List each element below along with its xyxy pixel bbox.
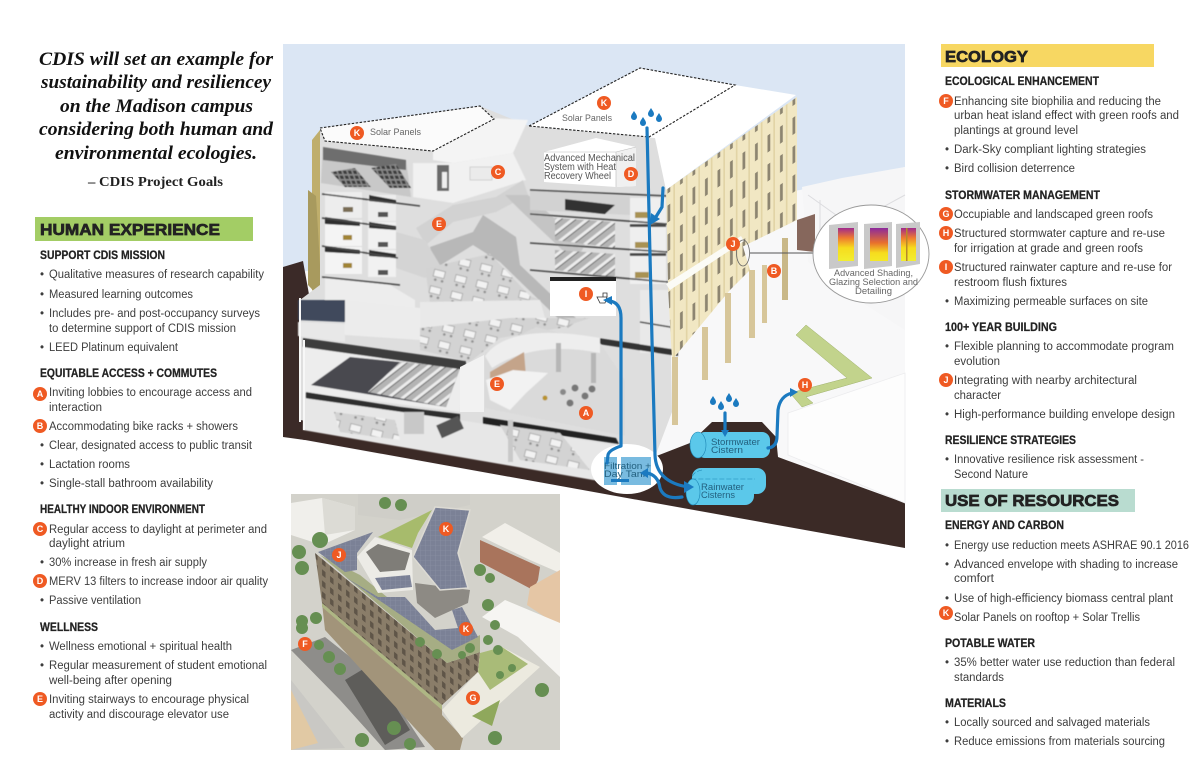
mechanical room floors xyxy=(530,190,678,356)
upper green deck xyxy=(320,555,480,663)
auditorium level xyxy=(303,338,466,420)
section: ecological enhancement: Dark-Sky compliant lighting strategies xyxy=(954,144,1146,156)
heading: human experience: HUMAN EXPERIENCE xyxy=(40,222,220,239)
icon: ground rain drops xyxy=(710,393,739,410)
section: energy and carbon: • xyxy=(945,540,949,552)
section: wellness: activity and discourage elevator use xyxy=(49,709,229,721)
panel: use of resources xyxy=(939,489,1189,748)
section: resilience strategies: • xyxy=(945,454,949,466)
section: wellness: • xyxy=(40,641,44,653)
title: sustainability and resiliencey xyxy=(40,72,272,93)
section: energy and carbon: Solar Panels on rooftop + Solar Trellis xyxy=(954,612,1140,624)
filtration and day tank: Day Tank xyxy=(604,469,648,480)
section: healthy indoor environment: D xyxy=(37,576,44,586)
title: considering both human and xyxy=(39,119,274,140)
stormwater cistern: Cistern xyxy=(711,445,743,456)
section: ecological enhancement: F xyxy=(943,96,949,106)
section: ecological enhancement xyxy=(939,76,1179,175)
slab lines xyxy=(322,190,668,285)
cut floor-plate edge xyxy=(300,298,304,430)
upper facade xyxy=(315,553,480,705)
heading: use of resources: USE OF RESOURCES xyxy=(945,493,1119,510)
green roof xyxy=(378,510,432,548)
mechanical unit xyxy=(544,138,636,187)
section: energy and carbon: Use of high-efficiency biomass central plant xyxy=(954,593,1174,605)
callout: shading and glazing: Detailing xyxy=(855,286,892,297)
section: materials: • xyxy=(945,717,949,729)
soft interior details xyxy=(298,118,678,482)
section: wellness: WELLNESS xyxy=(40,622,98,634)
section: energy and carbon xyxy=(939,520,1189,624)
section: equitable access and commutes: Lactation rooms xyxy=(49,459,130,471)
aerial markers xyxy=(298,522,480,705)
section: healthy indoor environment: Regular access to daylight at perimeter and xyxy=(49,524,267,536)
atrium lobby xyxy=(483,327,625,444)
section: potable water: 35% better water use reduction than federal xyxy=(954,657,1175,669)
left wing rooms xyxy=(325,192,415,318)
section: 100+ year building xyxy=(939,322,1175,421)
section: healthy indoor environment: 30% increase in fresh air supply xyxy=(49,557,207,569)
panel: goal statement xyxy=(39,49,274,189)
rainwater cisterns xyxy=(686,468,766,505)
section: ecological enhancement: Enhancing site biophilia and reducing the xyxy=(954,96,1161,108)
stormwater cistern: Stormwater xyxy=(711,437,760,448)
label: solar panels: Solar Panels xyxy=(562,113,612,124)
section: support CDIS mission: Measured learning outcomes xyxy=(49,289,193,301)
section: energy and carbon: Advanced envelope with shading to increase xyxy=(954,559,1178,571)
map markers: K xyxy=(354,128,361,138)
roof: solar panels right with upper plane xyxy=(529,68,796,190)
interior fill xyxy=(300,106,672,470)
title: on the Madison campus xyxy=(60,96,253,117)
section: potable water xyxy=(945,638,1175,684)
top floor hall xyxy=(321,147,411,197)
section: energy and carbon: Energy use reduction meets ASHRAE 90.1 2016 xyxy=(954,540,1189,552)
neighbouring building xyxy=(802,167,905,330)
open office desks xyxy=(425,254,540,302)
label: mechanical system: Recovery Wheel xyxy=(544,171,611,182)
section: support CDIS mission: • xyxy=(40,342,44,354)
roof: solar panels left xyxy=(320,106,494,151)
section: stormwater management: Structured stormwater capture and re-use xyxy=(954,228,1165,240)
section: equitable access and commutes: A xyxy=(37,389,44,399)
section: wellness: Regular measurement of student emotional xyxy=(49,660,267,672)
soil below ground xyxy=(283,422,905,548)
section: 100+ year building: Flexible planning to accommodate program xyxy=(954,341,1174,353)
section: equitable access and commutes: Inviting lobbies to encourage access and xyxy=(49,387,252,399)
section: equitable access and commutes: • xyxy=(40,478,44,490)
section: wellness: Wellness emotional + spiritual health xyxy=(49,641,232,653)
label: solar panels: Solar Panels xyxy=(370,127,421,138)
section: resilience strategies: RESILIENCE STRATEGIES xyxy=(945,435,1076,447)
section: materials: MATERIALS xyxy=(945,698,1006,710)
ground plane xyxy=(283,167,905,548)
section: stormwater management: Maximizing permeable surfaces on site xyxy=(954,296,1148,308)
title: environmental ecologies. xyxy=(55,143,257,164)
section: healthy indoor environment: • xyxy=(40,557,44,569)
section: stormwater management: STORMWATER MANAGEMENT xyxy=(945,190,1100,202)
plaza slab xyxy=(788,373,905,503)
callout: shading and glazing: Glazing Selection and xyxy=(829,277,918,288)
section: ecological enhancement: plantings at ground level xyxy=(954,125,1078,137)
street trees xyxy=(292,497,549,750)
filtration and day tank: Filtration + xyxy=(604,461,651,472)
surrounding buildings and streets xyxy=(291,494,560,750)
section: ecological enhancement: Bird collision deterrence xyxy=(954,163,1075,175)
map markers xyxy=(350,96,812,420)
section: 100+ year building: Integrating with nearby architectural xyxy=(954,375,1137,387)
basement study level xyxy=(303,398,620,482)
section: energy and carbon: • xyxy=(945,593,949,605)
sky xyxy=(283,44,905,304)
filtration and day tank xyxy=(591,444,663,494)
section: resilience strategies: Second Nature xyxy=(954,469,1028,481)
section: wellness: Inviting stairways to encourage physical xyxy=(49,694,249,706)
section: healthy indoor environment: daylight atrium xyxy=(49,538,125,550)
central white volume xyxy=(433,118,528,163)
map markers: K xyxy=(601,98,608,108)
panel: human experience xyxy=(33,217,268,721)
section: 100+ year building: • xyxy=(945,341,949,353)
aerial markers: K xyxy=(443,524,450,534)
section: support CDIS mission: Includes pre- and post-occupancy surveys xyxy=(49,308,260,320)
section: potable water: standards xyxy=(954,672,1004,684)
left facade edge xyxy=(312,130,322,300)
section: resilience strategies: Innovative resilience risk assessment - xyxy=(954,454,1144,466)
label: mechanical system: System with Heat xyxy=(544,162,616,173)
roof solar deck xyxy=(318,532,478,650)
section: support CDIS mission: SUPPORT CDIS MISSION xyxy=(40,250,165,262)
section: potable water: POTABLE WATER xyxy=(945,638,1036,650)
section: 100+ year building: J xyxy=(943,375,949,385)
aerial markers: G xyxy=(469,693,477,703)
section: stormwater management: G xyxy=(942,209,950,219)
section: materials: Locally sourced and salvaged materials xyxy=(954,717,1150,729)
toilet icon xyxy=(597,293,607,303)
section: healthy indoor environment: MERV 13 filters to increase indoor air quality xyxy=(49,576,268,588)
section: materials: Reduce emissions from materials sourcing xyxy=(954,736,1165,748)
section: healthy indoor environment: HEALTHY INDOOR ENVIRONMENT xyxy=(40,504,205,516)
title xyxy=(39,49,274,164)
map markers: I xyxy=(585,289,587,299)
section: resilience strategies xyxy=(945,435,1144,481)
section: wellness: well-being after opening xyxy=(48,675,172,687)
section: support CDIS mission: Qualitative measures of research capability xyxy=(49,269,264,281)
rainwater cisterns: Cisterns xyxy=(701,490,735,501)
aerial markers: F xyxy=(302,639,308,649)
map markers: E xyxy=(436,219,442,229)
section: materials: • xyxy=(945,736,949,748)
section: energy and carbon: • xyxy=(945,559,949,571)
section: ecological enhancement: urban heat island effect with green roofs and xyxy=(954,110,1179,122)
restroom white block xyxy=(550,278,616,316)
map markers: A xyxy=(583,408,590,418)
section: equitable access and commutes: EQUITABLE ACCESS + COMMUTES xyxy=(40,368,217,380)
attribution: – CDIS Project Goals xyxy=(87,174,223,189)
map markers: D xyxy=(628,169,635,179)
section: energy and carbon: ENERGY AND CARBON xyxy=(945,520,1064,532)
section: 100+ year building: • xyxy=(945,409,949,421)
section: energy and carbon: comfort xyxy=(954,573,995,585)
section: healthy indoor environment: C xyxy=(37,524,44,534)
heading: ecology: ECOLOGY xyxy=(945,49,1028,66)
facade: lower storeys and columns xyxy=(666,236,788,425)
terrace xyxy=(442,647,540,738)
heading: human experience xyxy=(35,217,253,241)
section: equitable access and commutes xyxy=(33,368,253,490)
podium facade xyxy=(322,603,463,750)
section: stormwater management: for irrigation at grade and green roofs xyxy=(954,243,1143,255)
panel: aerial rendering xyxy=(291,494,560,750)
aerial ground xyxy=(291,494,560,750)
section: wellness xyxy=(33,622,267,721)
section: 100+ year building: evolution xyxy=(954,356,1000,368)
section: 100+ year building: High-performance building envelope design xyxy=(954,409,1175,421)
section: wellness: E xyxy=(37,694,43,704)
water pipes xyxy=(603,128,798,498)
section: support CDIS mission: LEED Platinum equivalent xyxy=(49,342,179,354)
section: ecological enhancement: • xyxy=(945,144,949,156)
section: healthy indoor environment: Passive ventilation xyxy=(49,595,141,607)
aerial markers: J xyxy=(336,550,342,560)
section: stormwater management: H xyxy=(943,228,949,238)
section: stormwater management: Structured rainwater capture and re-use for xyxy=(954,262,1172,274)
green strip on podium xyxy=(322,600,442,710)
panel: ecology xyxy=(939,44,1179,481)
icon: roof rain drops xyxy=(631,108,662,126)
atrium block xyxy=(357,537,413,593)
panel: building section illustration xyxy=(283,44,929,548)
leader line xyxy=(750,252,815,254)
grand stair xyxy=(396,180,585,328)
section: ecological enhancement: • xyxy=(945,163,949,175)
building section interior xyxy=(298,106,678,482)
callout ring: J xyxy=(736,240,750,266)
section: equitable access and commutes: Clear, designated access to public transit xyxy=(49,440,253,452)
brown ground patch xyxy=(797,214,815,252)
left dark building xyxy=(283,261,310,440)
section: materials xyxy=(945,698,1165,748)
aerial markers: K xyxy=(463,624,470,634)
map markers: H xyxy=(802,380,808,390)
section: support CDIS mission xyxy=(40,250,264,354)
section: support CDIS mission: • xyxy=(40,269,44,281)
section: equitable access and commutes: Single-stall bathroom availability xyxy=(49,478,213,490)
central tower xyxy=(415,583,470,618)
section: equitable access and commutes: • xyxy=(40,440,44,452)
map markers: J xyxy=(730,239,736,249)
section: energy and carbon: K xyxy=(943,608,950,618)
section: wellness: • xyxy=(40,660,44,672)
section: 100+ year building: 100+ YEAR BUILDING xyxy=(945,322,1057,334)
section: stormwater management xyxy=(939,190,1172,308)
section: healthy indoor environment xyxy=(33,504,268,607)
section: support CDIS mission: to determine support of CDIS mission xyxy=(49,323,236,335)
map markers: C xyxy=(495,167,502,177)
map markers: E xyxy=(494,379,500,389)
section: ecological enhancement: ECOLOGICAL ENHANCEMENT xyxy=(945,76,1099,88)
section: stormwater management: Occupiable and landscaped green roofs xyxy=(954,209,1153,221)
section: 100+ year building: character xyxy=(954,390,1001,402)
section: support CDIS mission: • xyxy=(40,289,44,301)
section: stormwater management: • xyxy=(945,296,949,308)
label: mechanical system xyxy=(544,153,635,182)
stormwater cistern xyxy=(690,432,770,458)
section: equitable access and commutes: interaction xyxy=(49,402,102,414)
section: healthy indoor environment: • xyxy=(40,595,44,607)
green path xyxy=(790,325,872,407)
callout: shading and glazing xyxy=(813,205,929,303)
main solar roof xyxy=(413,507,470,590)
section: stormwater management: restroom flush fixtures xyxy=(954,277,1067,289)
facade: upper floors xyxy=(666,97,797,283)
section: equitable access and commutes: B xyxy=(37,421,44,431)
callout: shading and glazing: Advanced Shading, xyxy=(834,268,913,279)
section: support CDIS mission: • xyxy=(40,308,44,320)
section: potable water: • xyxy=(945,657,949,669)
title: CDIS will set an example for xyxy=(39,49,274,70)
rainwater cisterns: Rainwater xyxy=(701,482,744,493)
label: mechanical system: Advanced Mechanical xyxy=(544,153,635,164)
section: equitable access and commutes: Accommodating bike racks + showers xyxy=(49,421,238,433)
section: stormwater management: I xyxy=(945,262,947,272)
map markers: B xyxy=(771,266,778,276)
dark reading room xyxy=(298,300,345,322)
heading: use of resources xyxy=(941,489,1135,512)
heading: ecology xyxy=(941,44,1154,67)
section: equitable access and commutes: • xyxy=(40,459,44,471)
